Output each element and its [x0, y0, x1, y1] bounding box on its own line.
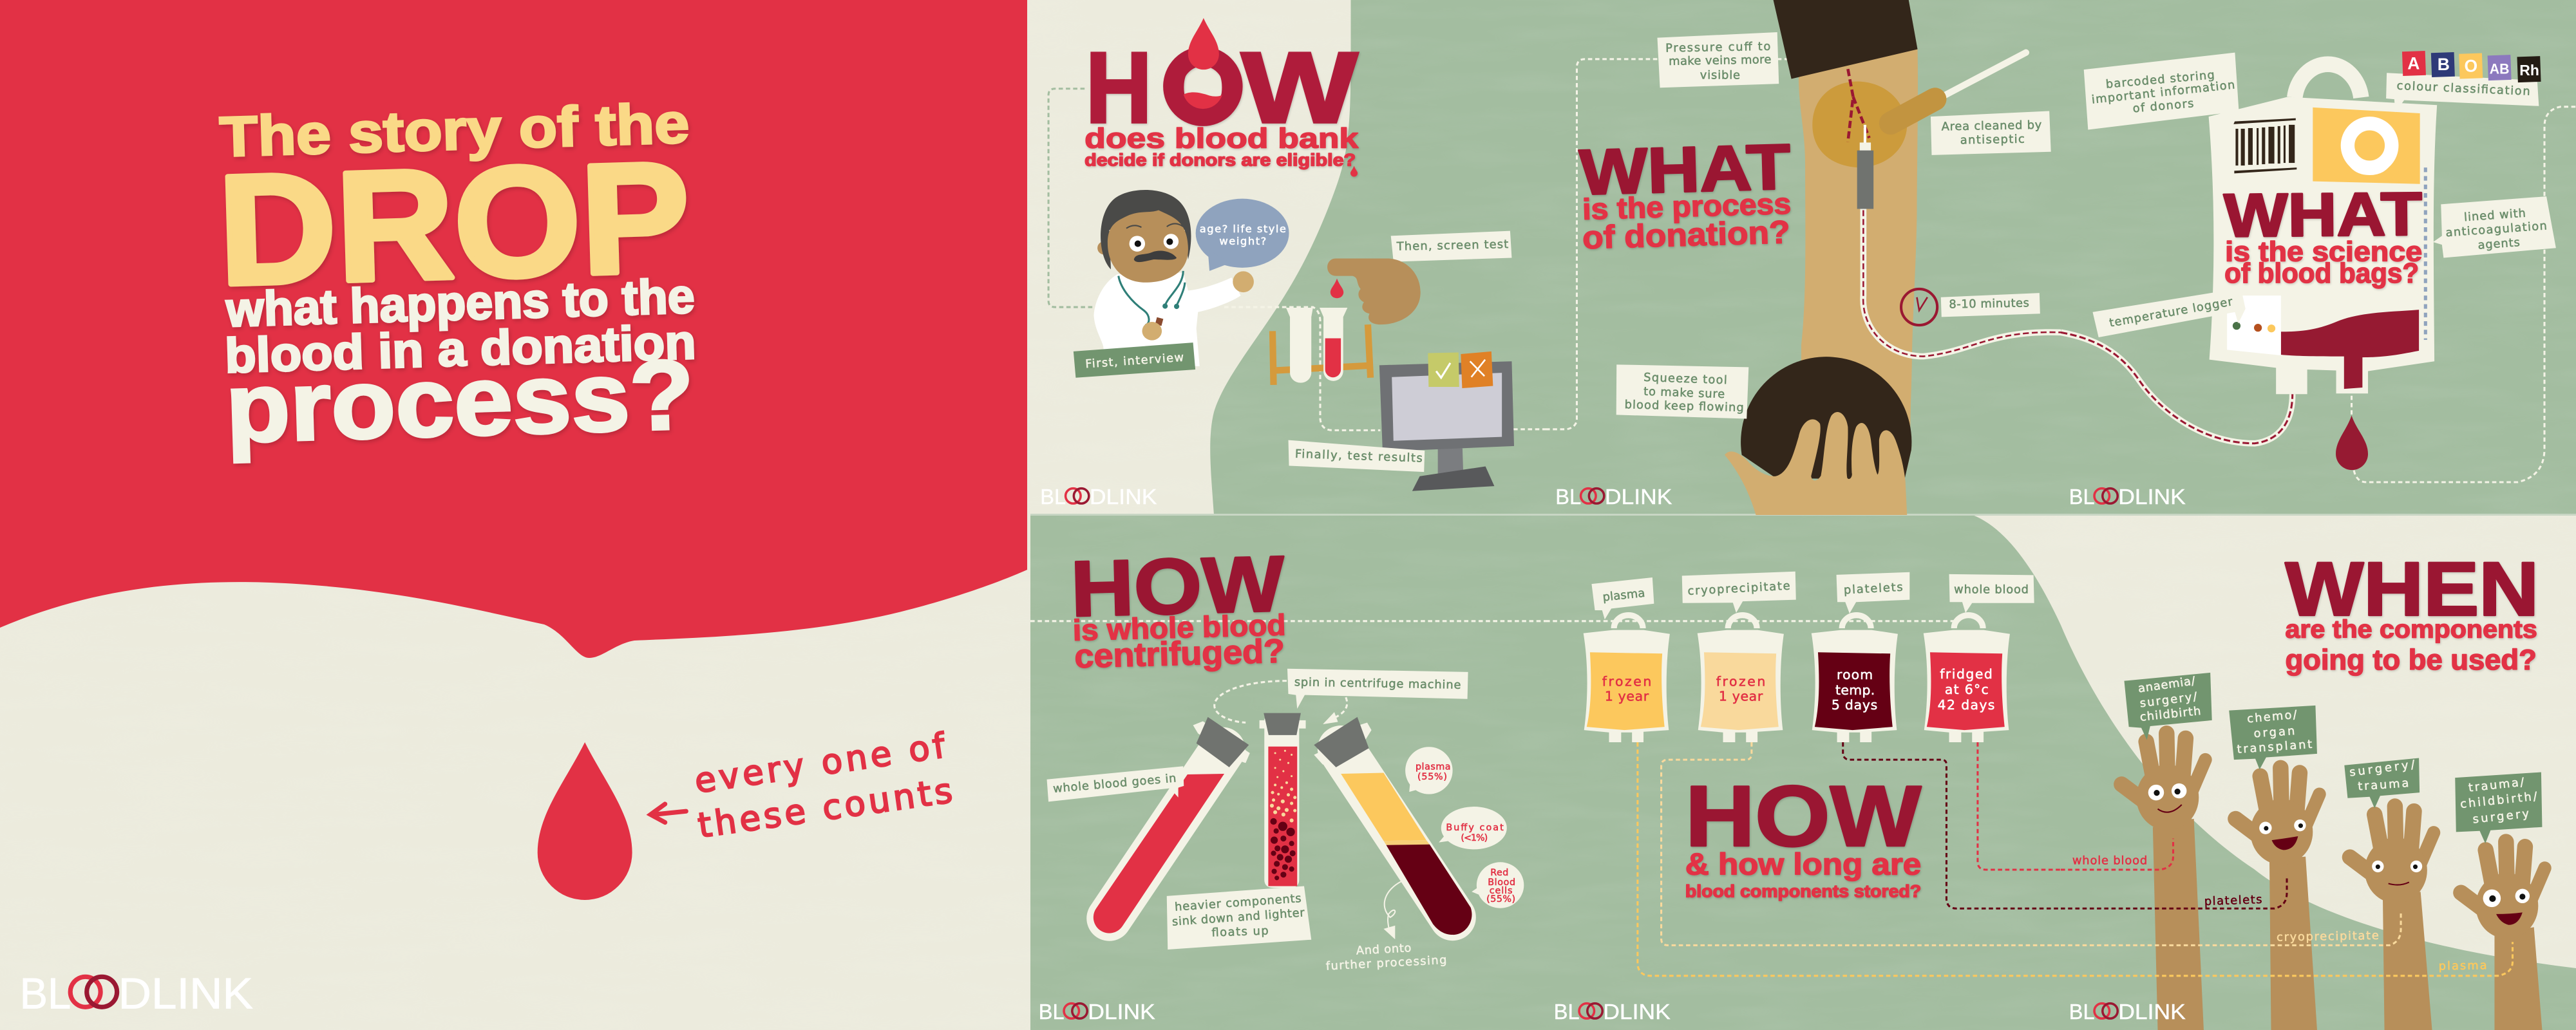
dashed line: platelets end	[2061, 876, 2287, 908]
label: heavier components: floats up	[1211, 924, 1269, 940]
heading: when: are the components	[2285, 615, 2537, 643]
text: plasma: plasma	[2438, 959, 2487, 973]
heading: what is the process of donation: of donation?	[1582, 214, 1790, 256]
blood type tags: B	[2438, 55, 2450, 74]
illustration: doctor	[1094, 190, 1254, 366]
bag: whole blood	[1924, 615, 2010, 742]
hand 1: whole blood recipient	[2121, 733, 2205, 1030]
callout: buffy coat: (<1%)	[1461, 833, 1488, 843]
label: whole blood goes in: whole blood goes in	[1052, 771, 1177, 796]
callout: plasma: (55%)	[1417, 772, 1447, 782]
hand 3: cryoprecipitate recipient	[2350, 807, 2434, 1030]
tag: trauma, childbirth, surgery	[2455, 772, 2542, 843]
label: spin in centrifuge machine	[1287, 669, 1468, 709]
callout: plasma	[1405, 747, 1453, 794]
heading: what is the science of blood bags: WHAT	[2224, 180, 2422, 250]
heading: how is whole blood centrifuged: centrifuged?	[1074, 633, 1285, 675]
label: temperature logger: temperature logger	[2108, 295, 2234, 330]
label: finally, test results: Finally, test results	[1295, 447, 1423, 465]
text: and onto further processing: further processing	[1325, 953, 1447, 973]
tube to blood bag	[2061, 332, 2293, 444]
logo: bloodlink: BL	[1555, 485, 1581, 509]
label: first, interview	[1074, 342, 1195, 378]
main title: The story of the	[218, 91, 690, 169]
label: squeeze tool: blood keep flowing	[1624, 398, 1744, 415]
label: cryoprecipitate	[1682, 572, 1796, 613]
arrow: onto further processing	[1383, 881, 1402, 939]
label: first, interview: First, interview	[1085, 351, 1184, 371]
logo: bloodlink: BL	[20, 969, 71, 1018]
tag: trauma, childbirth, surgery: surgery	[2472, 807, 2530, 827]
bag: plasma: frozen	[1602, 673, 1651, 689]
callout: every one of these counts: every one of	[692, 726, 949, 801]
text: and onto further processing: And onto	[1356, 941, 1412, 958]
bag: cryoprecipitate: 1 year	[1719, 688, 1763, 704]
callout: red blood cells: (55%)	[1486, 894, 1515, 904]
tag: trauma, childbirth, surgery: childbirth/	[2459, 790, 2539, 811]
arrow to drop	[650, 804, 686, 823]
logo: bloodlink: BL	[1039, 1000, 1065, 1024]
label: pressure cuff: visible	[1700, 68, 1740, 82]
label: barcoded storing: important information	[2091, 78, 2235, 107]
panel: how and how long are components stored	[1546, 572, 2061, 1024]
bag: cryoprecipitate: frozen	[1716, 673, 1765, 689]
subheading: does blood bank decide: does blood bank	[1084, 123, 1359, 154]
tag: anaemia, surgery, childbirth	[2124, 673, 2212, 740]
label: barcoded storing: of donors	[2132, 97, 2194, 115]
label: plasma	[1591, 577, 1654, 619]
icon: clock	[1901, 289, 1937, 325]
bag: whole blood: fridged	[1940, 666, 1993, 682]
label: temperature logger	[2092, 287, 2246, 337]
icon: drop under bag	[2336, 415, 2368, 470]
subheading: does blood bank decide	[1084, 123, 1359, 176]
illustration: blood bag	[2209, 64, 2437, 394]
icon: barcode	[2233, 118, 2297, 173]
dashed line: platelets route	[1843, 742, 2061, 908]
tag: trauma, childbirth, surgery: trauma/	[2468, 776, 2525, 795]
callout: every one of these counts	[692, 726, 955, 846]
illustration: arm	[1799, 50, 1918, 433]
dashed line: cryoprecipitate end	[2061, 911, 2401, 945]
label: squeeze tool	[1616, 364, 1748, 419]
callout: red blood cells: cells	[1490, 886, 1512, 896]
logo: bloodlink: BL	[2069, 1000, 2095, 1024]
logo: bloodlink: DLINK	[1603, 1000, 1671, 1024]
illustration: squeeze ball and hand	[1725, 357, 1911, 515]
blood type tags: O	[2465, 57, 2477, 76]
label: platelets	[1837, 572, 1909, 613]
label: area cleaned by antiseptic: Area cleaned by	[1942, 118, 2042, 134]
panel: how is whole blood centrifuged	[1030, 539, 1546, 1024]
heading: how: H	[1086, 32, 1152, 144]
heading: how is whole blood centrifuged	[1070, 539, 1286, 675]
dashed line: whole blood route	[1978, 742, 2061, 870]
bag: platelets	[1812, 615, 1898, 742]
text: platelets: platelets	[2204, 893, 2262, 908]
label: squeeze tool: Squeeze tool	[1643, 371, 1727, 387]
logo: bloodlink: BL	[1554, 1000, 1580, 1024]
icon: drop on o	[1184, 18, 1222, 109]
tag: surgery, trauma: surgery/	[2349, 758, 2416, 780]
heading: how is whole blood centrifuged: HOW	[1070, 539, 1285, 633]
label: heavier components: heavier components	[1174, 892, 1302, 914]
callout: every one of these counts: these counts	[696, 771, 955, 846]
dashed path: test to screen result	[1224, 307, 1546, 430]
label: pressure cuff: make veins more	[1669, 53, 1772, 68]
main title: process?	[224, 339, 696, 464]
heading: how is whole blood centrifuged: is whole blood	[1072, 608, 1286, 647]
heading: when	[2285, 547, 2539, 676]
label: colour classification	[2386, 73, 2539, 112]
label: 8-10 minutes	[1941, 293, 2040, 317]
heading: when: going to be used?	[2285, 643, 2537, 676]
heading: what is the process of donation: WHAT	[1578, 131, 1792, 209]
speech bubble: age, lifestyle, weight	[1196, 199, 1289, 271]
label: then, screen test: Then, screen test	[1396, 238, 1508, 254]
main title: DROP	[216, 129, 692, 318]
heading: what is the process of donation	[1578, 131, 1792, 256]
illustration: needle and tube	[1857, 125, 2061, 357]
heading: how and how long: & how long are	[1685, 848, 1921, 881]
label: plasma: plasma	[1602, 586, 1645, 604]
illustration: computer monitor	[1379, 351, 1514, 491]
logo: bloodlink: DLINK	[2118, 1000, 2186, 1024]
bag: plasma	[1584, 615, 1670, 742]
label: cryoprecipitate: cryoprecipitate	[1687, 579, 1790, 598]
heading: how: O	[1164, 32, 1242, 144]
label: spin in centrifuge machine: spin in centrifuge machine	[1294, 675, 1461, 692]
text: cryoprecipitate: cryoprecipitate	[2277, 929, 2379, 944]
dashed line: cryoprecipitate route	[1662, 742, 2061, 945]
logo: bloodlink	[2069, 1000, 2186, 1024]
blood type tags: AB	[2490, 61, 2509, 77]
logo: bloodlink	[20, 969, 253, 1018]
heading: how and how long	[1685, 769, 1922, 901]
label: then, screen test	[1391, 231, 1511, 262]
blood type tags: A	[2407, 54, 2420, 73]
bag: whole blood: 42 days	[1938, 697, 1994, 713]
tag: anaemia, surgery, childbirth: anaemia/	[2137, 674, 2197, 695]
illustration: tube of whole blood	[1094, 717, 1250, 933]
label: lined with anticoagulation agents: agents	[2477, 236, 2520, 252]
tag: surgery, trauma	[2344, 758, 2420, 809]
label: area cleaned by antiseptic: antiseptic	[1960, 133, 2025, 147]
callout: red blood cells	[1472, 862, 1524, 908]
label: barcoded storing	[2084, 53, 2239, 130]
bag: plasma: 1 year	[1605, 688, 1649, 704]
blood type tags	[2402, 51, 2541, 82]
label: platelets: platelets	[1843, 581, 1903, 597]
label: area cleaned by antiseptic	[1931, 111, 2051, 155]
panel: how does blood bank decide eligibility	[1040, 18, 1546, 509]
logo: bloodlink	[1040, 485, 1157, 509]
label: lined with anticoagulation agents	[2433, 196, 2556, 258]
text: and onto further processing	[1325, 941, 1447, 973]
illustration: finger with blood drop	[1327, 259, 1421, 324]
main title	[216, 91, 697, 464]
logo: bloodlink	[1554, 1000, 1671, 1024]
label: lined with anticoagulation agents: anticoagulation	[2445, 219, 2548, 239]
label: heavier components: sink down and lighter	[1171, 906, 1305, 929]
logo: bloodlink: DLINK	[2118, 485, 2186, 509]
label: pressure cuff: Pressure cuff to	[1665, 40, 1771, 55]
illustration: veins	[1848, 69, 1870, 142]
hand 2: platelets recipient	[2235, 768, 2320, 1030]
icon: blood drop	[538, 742, 632, 900]
dashed arrow: spin in centrifuge	[1215, 681, 1347, 724]
logo: bloodlink: DLINK	[1090, 485, 1157, 509]
tag: anaemia, surgery, childbirth: surgery/	[2139, 690, 2199, 710]
label: pressure cuff	[1657, 32, 1779, 88]
illustration: blood bag: O	[2341, 103, 2398, 191]
dashed line: plasma end	[2061, 942, 2513, 976]
speech bubble: age, lifestyle, weight: age? life style	[1200, 223, 1286, 235]
bag: platelets: 5 days	[1832, 697, 1877, 713]
illustration: antiseptic area and swab	[1812, 53, 2026, 167]
logo: bloodlink	[2069, 485, 2186, 509]
callout: plasma: plasma	[1416, 762, 1451, 772]
panel: what is the science of blood bags	[2061, 51, 2576, 509]
heading: what is the science of blood bags: of blood bags?	[2224, 258, 2419, 289]
logo: bloodlink: DLINK	[118, 969, 253, 1018]
heading: how and how long: HOW	[1685, 769, 1922, 865]
dashed line: from centrifuge	[1546, 619, 1956, 623]
tag: chemo, organ transplant: transplant	[2237, 738, 2313, 756]
label: 8-10 minutes: 8-10 minutes	[1949, 296, 2029, 312]
tag: anaemia, surgery, childbirth: childbirth	[2139, 704, 2201, 724]
panel: what is the process of donation	[1546, 0, 2061, 515]
label: finally, test results	[1289, 440, 1425, 472]
label: lined with anticoagulation agents: lined with	[2463, 207, 2526, 224]
callout: buffy coat: Buffy coat	[1446, 823, 1504, 833]
label: whole blood: whole blood	[1954, 583, 2029, 596]
tag: chemo, organ transplant	[2229, 706, 2317, 769]
dashed path: bag to centrifuge	[2352, 107, 2576, 482]
panel: the story of the drop	[20, 91, 955, 1018]
subheading: does blood bank decide: decide if donors are eligible?	[1084, 151, 1356, 170]
panel: when are the components used	[2061, 547, 2545, 1030]
bag: whole blood: at 6°c	[1945, 682, 1989, 697]
logo: bloodlink: DLINK	[1605, 485, 1672, 509]
logo: bloodlink: DLINK	[1088, 1000, 1155, 1024]
main title: what happens to the	[225, 269, 696, 337]
illustration: separated tube	[1314, 717, 1472, 935]
label: colour classification: colour classification	[2396, 79, 2530, 98]
dashed line: whole blood end	[2061, 839, 2173, 870]
illustration: test tube rack	[1273, 308, 1370, 385]
callout: red blood cells: Blood	[1488, 877, 1515, 888]
heading: how	[1086, 32, 1358, 144]
label: squeeze tool: to make sure	[1643, 385, 1725, 401]
heading: what is the science of blood bags	[2224, 180, 2422, 289]
bag: platelets: room	[1837, 667, 1873, 682]
tag: chemo, organ transplant: chemo/	[2246, 708, 2298, 726]
heading: what is the science of blood bags: is the science	[2225, 236, 2422, 268]
tag: surgery, trauma: trauma	[2358, 776, 2409, 794]
dashed path: interview to screen	[1048, 89, 1096, 307]
label: barcoded storing: barcoded storing	[2105, 68, 2215, 91]
heading: how and how long: blood components stored?	[1685, 881, 1921, 901]
label: whole blood	[1949, 574, 2034, 613]
speech bubble: age, lifestyle, weight: weight?	[1219, 235, 1266, 247]
logo: bloodlink	[1039, 1000, 1155, 1024]
tag: chemo, organ transplant: organ	[2253, 724, 2295, 740]
callout: buffy coat	[1439, 807, 1507, 849]
heading: when: WHEN	[2285, 547, 2539, 632]
blood type tags: Rh	[2519, 62, 2539, 79]
illustration: tube separating	[1260, 713, 1306, 888]
dashed line: plasma route	[1638, 742, 2061, 976]
logo: bloodlink: BL	[2069, 485, 2095, 509]
logo: bloodlink	[1555, 485, 1672, 509]
dashed path: screen to donation	[1546, 59, 1787, 429]
main title: blood in a donation	[224, 315, 697, 383]
heading: how: W	[1242, 32, 1358, 144]
callout: red blood cells: Red	[1490, 868, 1508, 878]
label: whole blood goes in	[1047, 766, 1184, 801]
bag: cryoprecipitate	[1698, 615, 1784, 742]
text: whole blood: whole blood	[2072, 854, 2147, 867]
heading: what is the process of donation: is the process	[1582, 187, 1792, 226]
dashed path: centrifuge to storage	[1030, 619, 1546, 623]
hand 4: plasma recipient	[2461, 842, 2545, 1030]
label: heavier components	[1167, 886, 1311, 950]
logo: bloodlink: BL	[1040, 485, 1066, 509]
illustration: pressure cuff sleeve	[1774, 0, 1918, 79]
bag: platelets: temp.	[1835, 682, 1875, 698]
